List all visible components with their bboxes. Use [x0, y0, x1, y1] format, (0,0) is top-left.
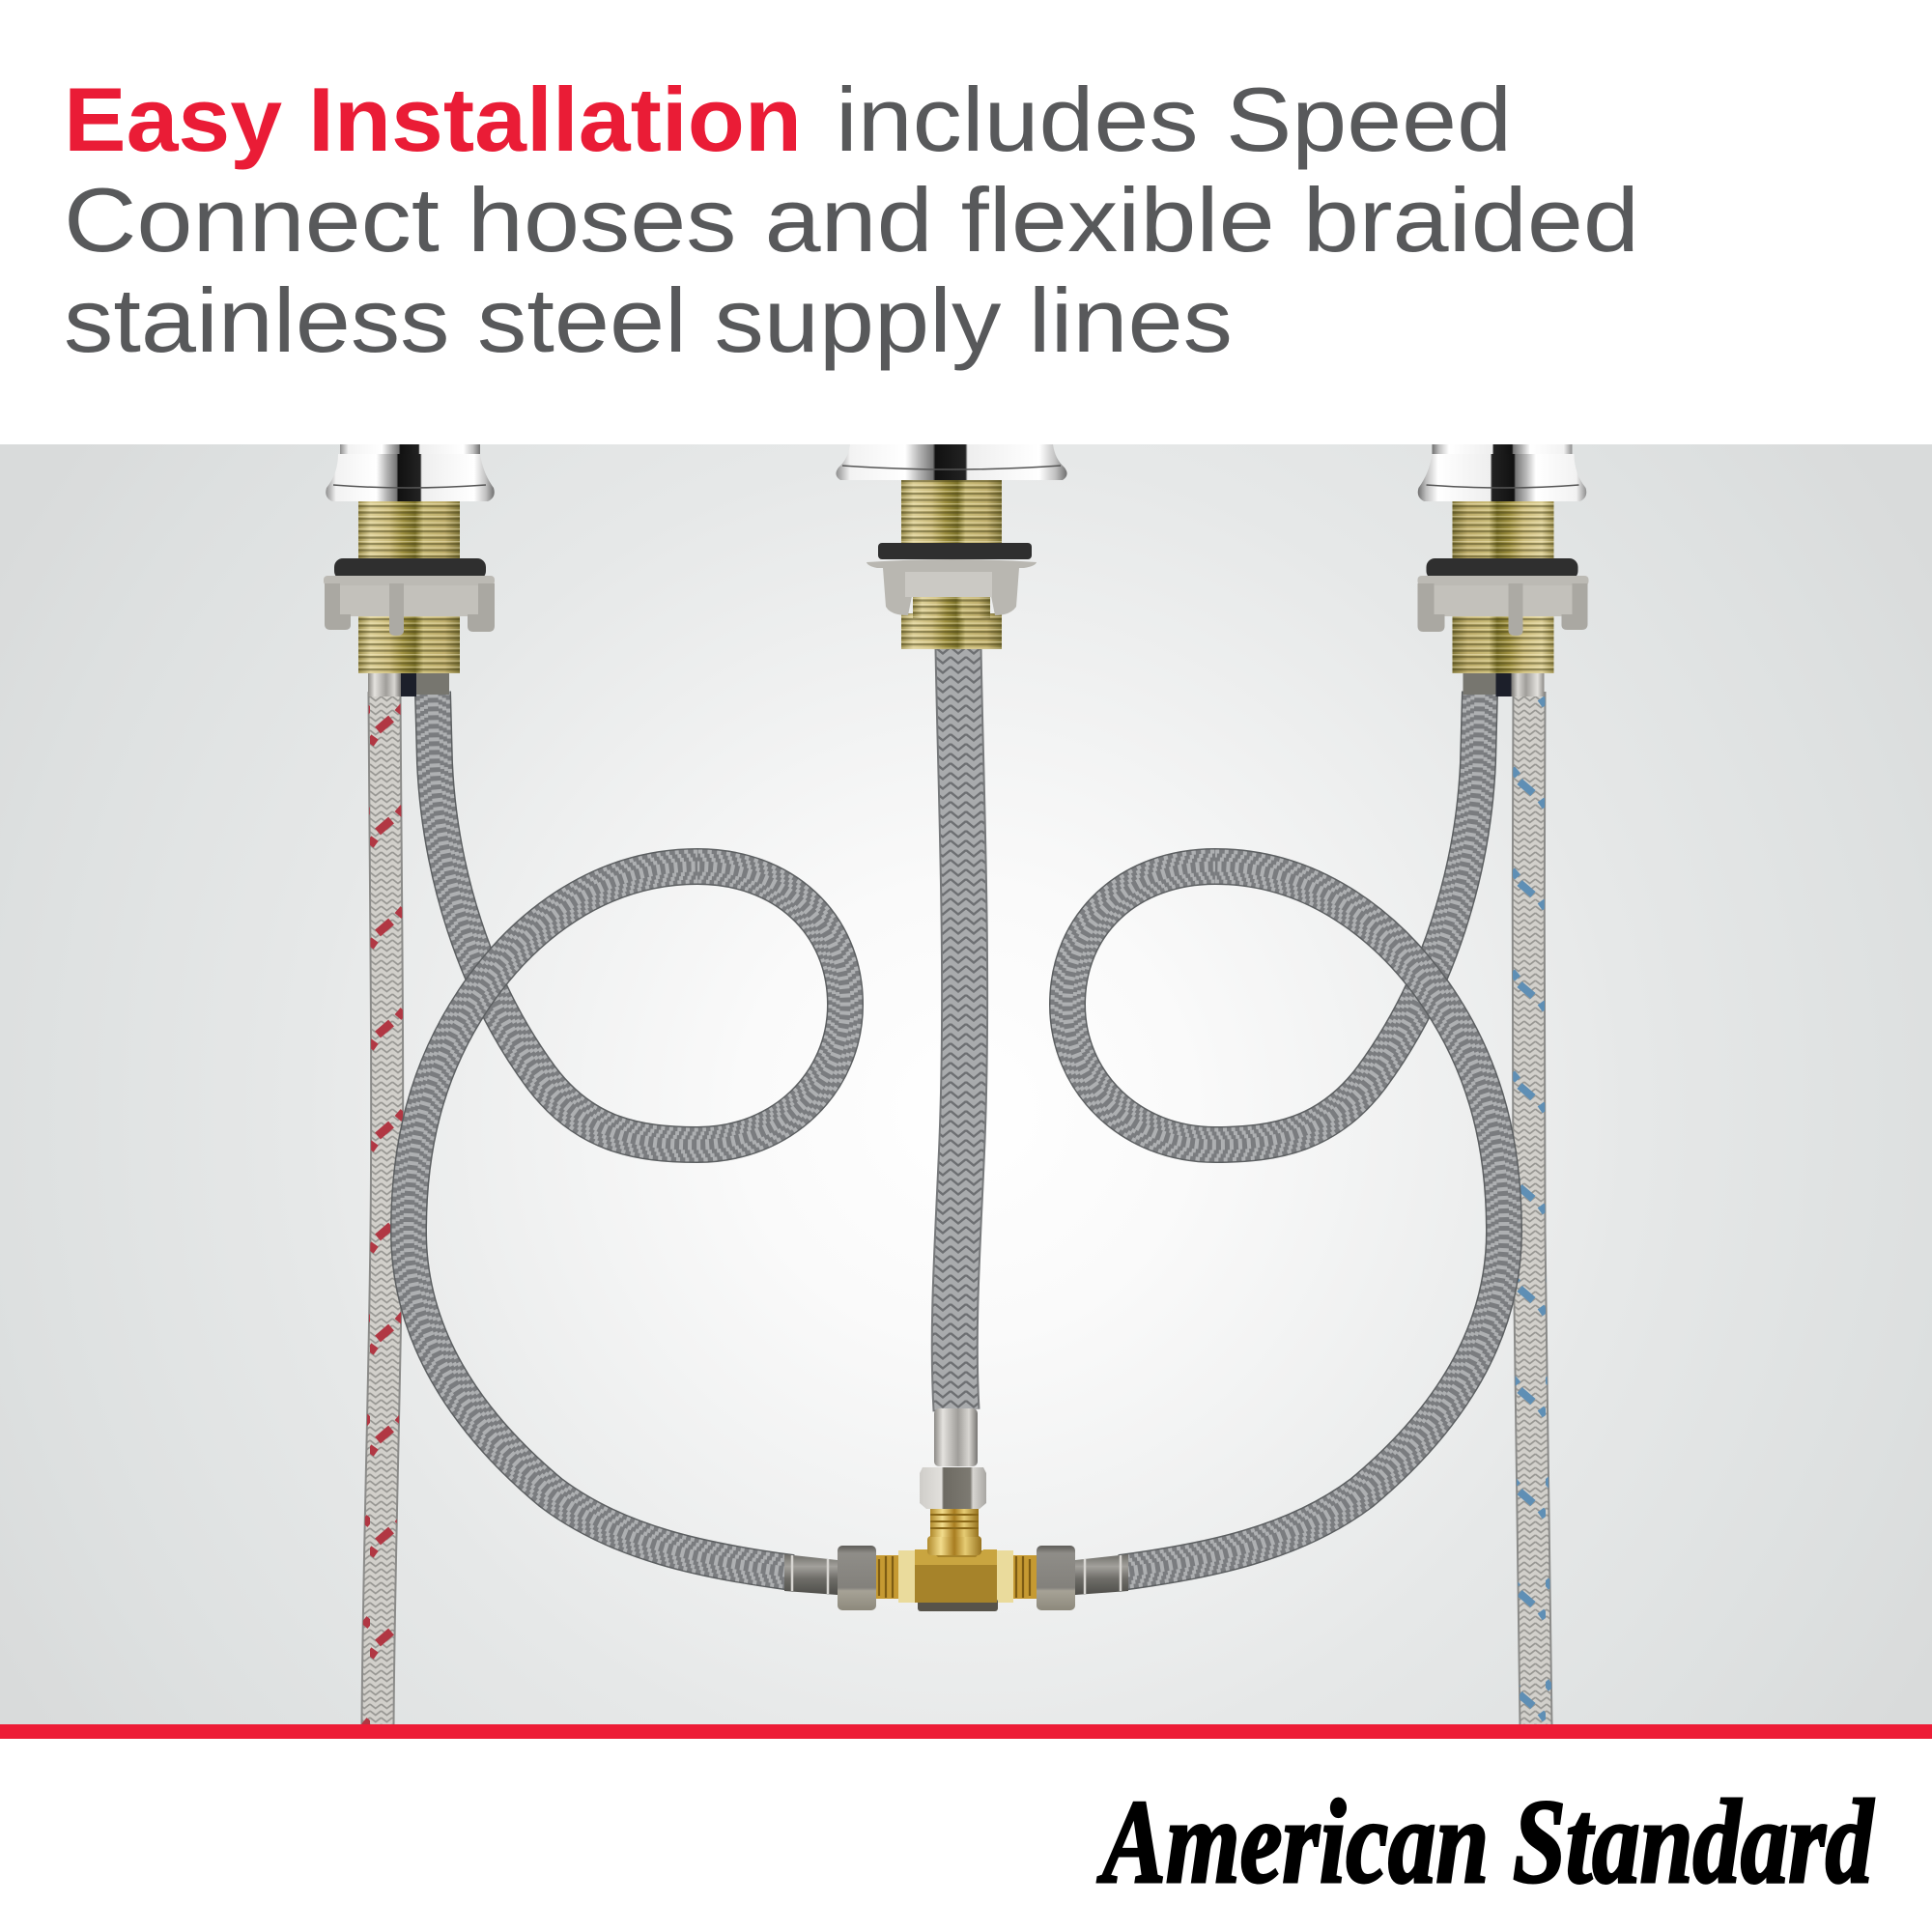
hose: left looped braided hose	[409, 692, 845, 1573]
heading: Connect hoses and flexible braided	[64, 169, 1639, 270]
hose: centre braided hose	[954, 647, 965, 1410]
valve: left shank with mounting nut	[324, 444, 495, 696]
valve: right shank with mounting nut	[1418, 444, 1588, 696]
heading: Easy Installation	[64, 69, 802, 170]
heading	[64, 69, 1639, 371]
red divider bar	[0, 1724, 1932, 1739]
hose: right looped braided hose	[1067, 692, 1504, 1573]
heading: includes Speed	[836, 69, 1512, 170]
hose: right blue-striped supply line	[1528, 692, 1536, 1725]
T fitting	[784, 1408, 1128, 1611]
valve: centre shank with mounting nut	[836, 444, 1067, 649]
photo panel background	[0, 444, 1932, 1725]
heading: stainless steel supply lines	[64, 270, 1233, 371]
hose: left red-striped supply line	[378, 692, 387, 1725]
